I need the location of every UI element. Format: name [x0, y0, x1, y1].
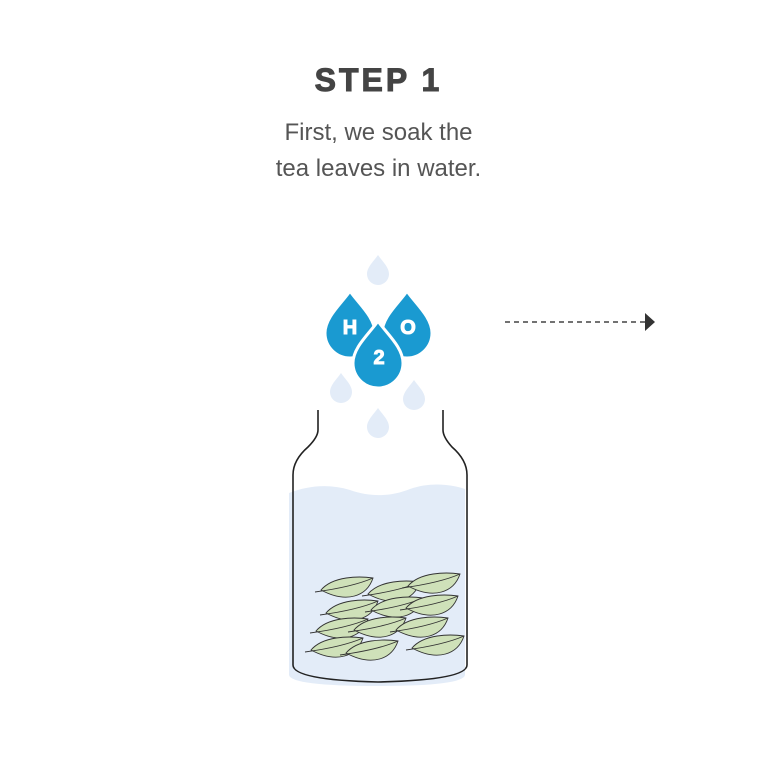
- icon: H2O drops: O: [400, 317, 416, 339]
- bottle with water: [289, 410, 467, 686]
- arrow: [505, 313, 655, 331]
- icon: H2O drops: H: [343, 317, 357, 339]
- subtitle text: First, we soak the: [284, 119, 473, 146]
- subtitle text: [276, 119, 481, 182]
- tea leaves: [305, 573, 464, 660]
- icon: small water drops: [330, 255, 425, 438]
- title: STEP 1: [315, 62, 442, 98]
- icon: H2O drops: 2: [373, 347, 385, 369]
- icon: H2O drops: [325, 291, 432, 388]
- subtitle text: tea leaves in water.: [276, 155, 481, 182]
